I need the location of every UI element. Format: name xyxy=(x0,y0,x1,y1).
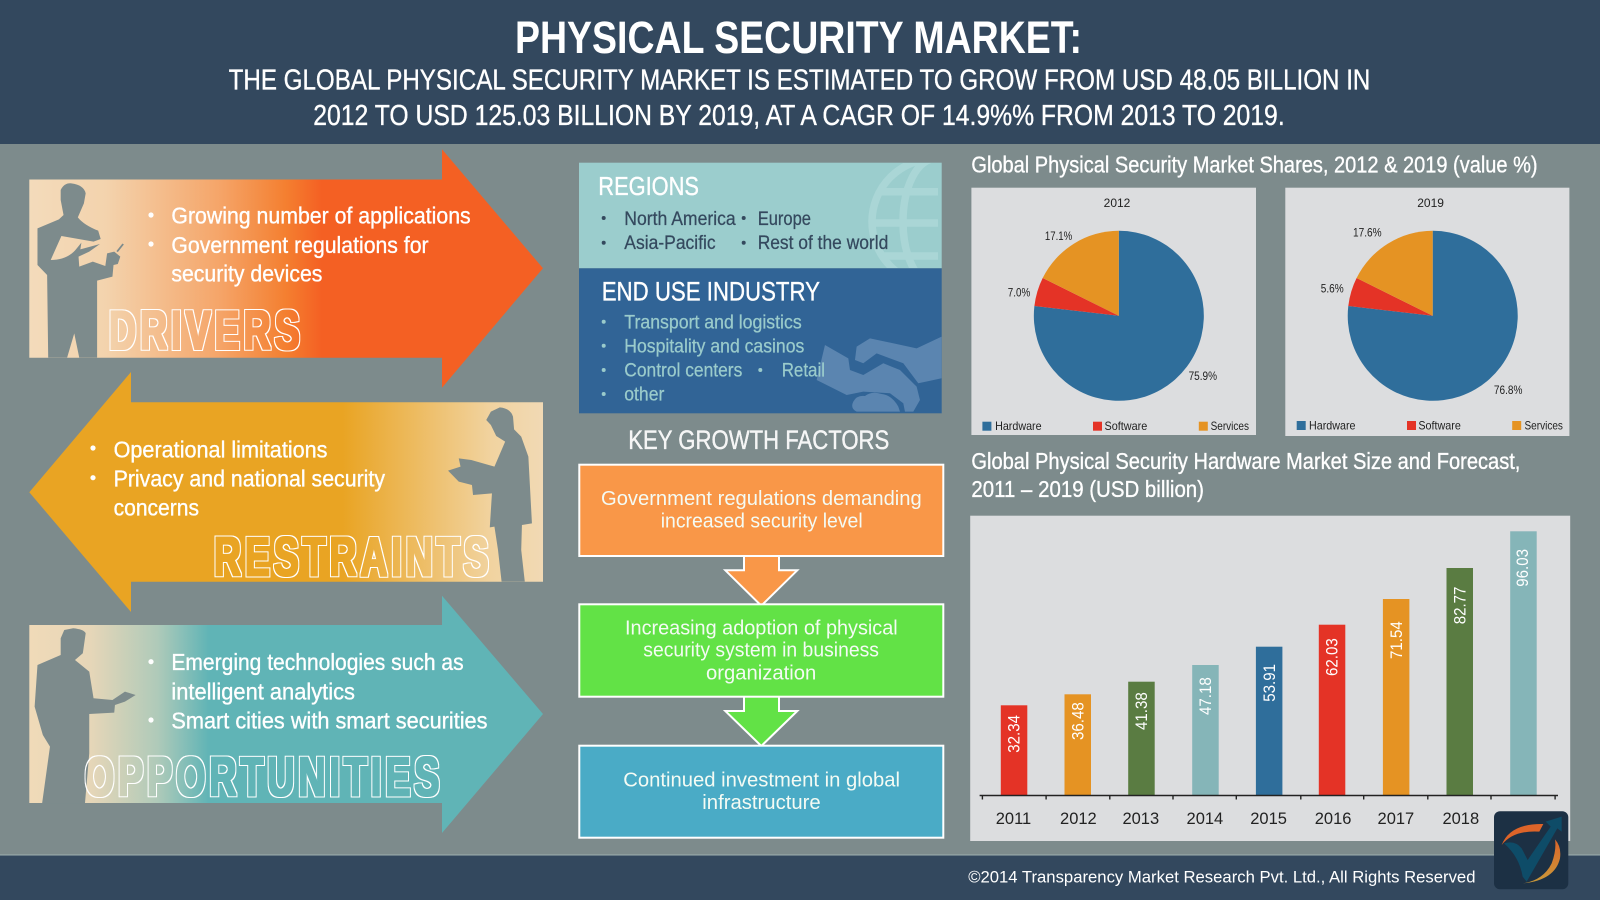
heading: restraints: RESTRAINTS xyxy=(214,525,492,587)
pie chart: 2012 xyxy=(971,188,1256,435)
year labels: 2014 xyxy=(1187,810,1223,828)
bar values: 32.34 xyxy=(1005,715,1024,753)
header band xyxy=(0,0,1600,144)
box: continued investment: Continued investment in global xyxy=(623,770,900,792)
icon: man reading silhouette xyxy=(448,407,532,582)
pie chart: 2012: 7.0% xyxy=(1008,286,1030,300)
box: government regulations xyxy=(579,465,943,556)
box: adoption of physical security xyxy=(579,604,943,697)
regions list xyxy=(602,208,888,254)
box: adoption of physical security: Increasing adoption of physical xyxy=(625,617,898,639)
bar values: 41.38 xyxy=(1132,692,1151,730)
year labels: 2017 xyxy=(1378,810,1414,828)
pie chart: 2019: 5.6% xyxy=(1321,282,1344,296)
pie chart: 2019 xyxy=(1285,188,1569,436)
heading: end use industry: END USE INDUSTRY xyxy=(602,277,820,307)
restraint bullets: concerns xyxy=(114,495,199,521)
heading: key growth factors: KEY GROWTH FACTORS xyxy=(628,425,889,455)
bar values: 47.18 xyxy=(1196,677,1215,715)
driver bullets: Growing number of applications xyxy=(171,202,471,228)
opportunity bullets: Smart cities with smart securities xyxy=(171,707,488,733)
copyright: ©2014 Transparency Market Research Pvt. Ltd., All Rights Reserved xyxy=(968,868,1476,886)
pie chart: 2012: 75.9% xyxy=(1189,369,1217,383)
bar values: 71.54 xyxy=(1387,621,1406,659)
year labels: 2015 xyxy=(1250,810,1287,828)
panel: drivers arrow xyxy=(29,149,543,388)
restraint bullets: Privacy and national security xyxy=(114,466,385,492)
year labels: 2016 xyxy=(1315,810,1351,828)
bar chart: hardware market 2011-2019 xyxy=(970,516,1570,841)
pie chart: 2019: 76.8% xyxy=(1494,383,1523,397)
box: government regulations: increased security level xyxy=(661,510,863,532)
subtitle line 1: THE GLOBAL PHYSICAL SECURITY MARKET IS ESTIMATED TO GROW FROM USD 48.05 BILLION IN xyxy=(229,64,1370,96)
legend 2019: Hardware xyxy=(1309,418,1356,432)
opportunity bullets xyxy=(148,649,488,733)
opportunity bullets: intelligent analytics xyxy=(171,678,355,704)
title: PHYSICAL SECURITY MARKET: xyxy=(515,12,1082,63)
bar values: 82.77 xyxy=(1450,587,1469,624)
icon: company logo xyxy=(1494,811,1568,889)
year labels: 2012 xyxy=(1060,810,1097,828)
icon: man with remote silhouette xyxy=(37,183,123,358)
bar values xyxy=(1005,549,1532,753)
box: adoption of physical security: security system in business xyxy=(643,640,879,662)
opportunity bullets: Emerging technologies such as xyxy=(171,649,464,675)
industry list: Control centers xyxy=(624,360,743,382)
bars xyxy=(1001,531,1537,795)
legend 2019 xyxy=(1297,418,1563,432)
legend 2012: Services xyxy=(1211,419,1249,433)
panel: restraints arrow xyxy=(29,372,543,612)
industry list: other xyxy=(624,384,665,406)
box: continued investment: infrastructure xyxy=(702,792,821,814)
legend 2012: Hardware xyxy=(995,419,1042,433)
year labels: 2018 xyxy=(1442,810,1479,828)
bar values: 36.48 xyxy=(1068,702,1087,740)
year labels xyxy=(996,810,1479,828)
industry list: Hospitality and casinos xyxy=(624,335,805,357)
pie chart: 2012: 2012 xyxy=(1104,196,1131,210)
year labels: 2013 xyxy=(1122,810,1159,828)
heading: regions: REGIONS xyxy=(598,173,699,201)
heading: opportunities: OPPORTUNITIES xyxy=(85,745,443,807)
legend 2012: Software xyxy=(1104,419,1148,433)
footer band xyxy=(0,854,1600,900)
bar values: 96.03 xyxy=(1513,549,1532,587)
driver bullets: security devices xyxy=(171,261,322,287)
subtitle line 2: 2012 TO USD 125.03 BILLION BY 2019, AT A CAGR OF 14.9%% FROM 2013 TO 2019. xyxy=(313,100,1285,132)
legend 2019: Services xyxy=(1524,418,1563,432)
pie chart: 2019: 2019 xyxy=(1417,196,1444,210)
industry list: Transport and logistics xyxy=(624,311,802,333)
regions list: Rest of the world xyxy=(758,232,888,254)
legend 2019: Software xyxy=(1418,418,1461,432)
regions list: North America xyxy=(624,208,736,230)
restraint bullets: Operational limitations xyxy=(114,436,327,462)
industry list xyxy=(602,311,825,406)
pie chart: 2019: 17.6% xyxy=(1353,226,1382,240)
bar values: 53.91 xyxy=(1260,664,1279,702)
driver bullets xyxy=(148,202,471,287)
heading: hardware market size: Global Physical Security Hardware Market Size and Forecast, xyxy=(971,448,1520,474)
panel: opportunities arrow xyxy=(29,596,543,833)
icon: handshake xyxy=(817,337,942,412)
bar values: 62.03 xyxy=(1323,638,1342,676)
icon: globe xyxy=(868,163,938,268)
panel: regions xyxy=(579,162,942,268)
flowchart: arrow 1 xyxy=(725,556,797,606)
regions list: Europe xyxy=(758,208,811,230)
box: continued investment xyxy=(579,746,943,838)
flowchart: arrow 2 xyxy=(725,697,797,746)
heading: hardware market size xyxy=(971,448,1520,502)
legend 2012 xyxy=(982,419,1249,433)
heading: hardware market size: 2011 – 2019 (USD billion) xyxy=(971,476,1204,502)
industry list: Retail xyxy=(782,360,825,382)
icon: presenter silhouette xyxy=(35,628,136,803)
regions list: Asia-Pacific xyxy=(624,232,716,254)
box: government regulations: Government regulations demanding xyxy=(601,488,922,510)
pie chart: 2012: 17.1% xyxy=(1045,229,1072,243)
year labels: 2011 xyxy=(996,810,1031,828)
heading: drivers: DRIVERS xyxy=(109,299,304,361)
box: adoption of physical security: organization xyxy=(706,662,816,684)
restraint bullets xyxy=(90,436,385,521)
panel: end use industry xyxy=(579,268,942,413)
driver bullets: Government regulations for xyxy=(171,232,429,258)
